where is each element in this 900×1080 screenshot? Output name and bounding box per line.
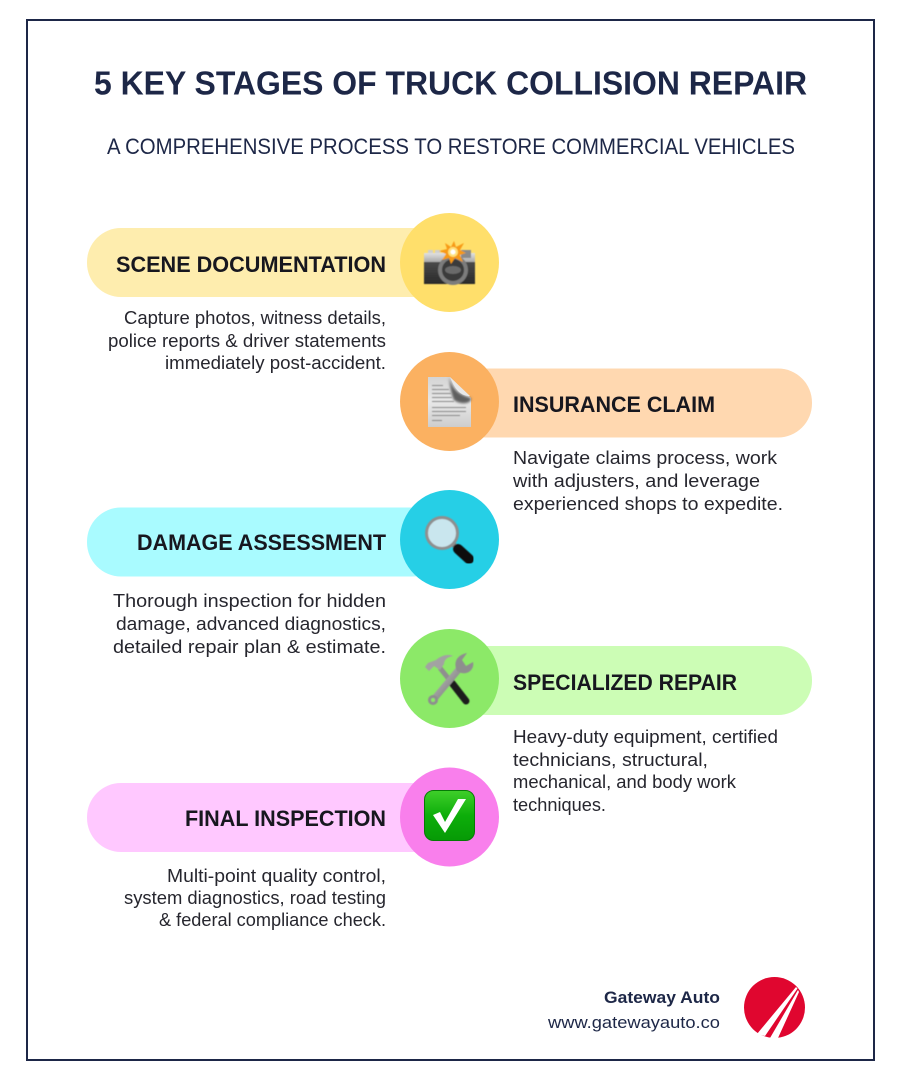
description: Navigate claims process, work <box>513 448 778 468</box>
description: system diagnostics, road testing <box>124 888 386 908</box>
description: police reports & driver statements <box>108 331 386 351</box>
heading: SPECIALIZED REPAIR <box>513 670 737 695</box>
heading: SCENE DOCUMENTATION <box>116 252 386 277</box>
circle <box>400 768 499 866</box>
description: Multi-point quality control, <box>167 866 386 886</box>
panel: insurance claim <box>400 352 812 514</box>
panel: damage assessment <box>87 490 499 657</box>
icon: hammer and wrench <box>425 653 473 705</box>
description <box>512 448 783 514</box>
description: technicians, structural, <box>513 750 708 770</box>
description: immediately post-accident. <box>165 353 386 373</box>
description <box>513 727 778 815</box>
circle <box>400 629 499 728</box>
description: experienced shops to expedite. <box>513 494 783 514</box>
description: mechanical, and body work <box>513 772 737 792</box>
pill <box>87 508 447 576</box>
heading: FINAL INSPECTION <box>185 806 386 831</box>
panel: specialized repair <box>400 629 812 815</box>
heading: INSURANCE CLAIM <box>513 392 715 417</box>
description: techniques. <box>513 795 606 815</box>
description: damage, advanced diagnostics, <box>116 614 386 634</box>
panel: final inspection <box>87 768 499 930</box>
icon: check mark <box>424 790 474 840</box>
title: 5 KEY STAGES OF TRUCK COLLISION REPAIR <box>94 64 807 102</box>
icon: camera with flash <box>424 241 475 285</box>
pill <box>452 368 812 438</box>
description: Heavy-duty equipment, certified <box>513 727 778 747</box>
circle <box>400 490 499 589</box>
pill <box>452 646 812 715</box>
panel: scene documentation <box>87 213 499 373</box>
description <box>124 866 386 930</box>
subtitle: A COMPREHENSIVE PROCESS TO RESTORE COMMERCIAL VEHICLES <box>107 134 795 159</box>
footer: brand name: Gateway Auto <box>604 989 720 1007</box>
footer: website: www.gatewayauto.co <box>547 1014 720 1032</box>
circle <box>400 213 499 312</box>
description: with adjusters, and leverage <box>512 471 760 491</box>
description <box>108 308 386 373</box>
description <box>113 591 386 657</box>
icon: magnifying glass <box>426 518 469 559</box>
heading: DAMAGE ASSESSMENT <box>137 530 387 555</box>
description: Thorough inspection for hidden <box>113 591 386 611</box>
description: Capture photos, witness details, <box>124 308 386 328</box>
pill <box>87 228 447 297</box>
icon: document page <box>428 377 471 427</box>
circle <box>400 352 499 451</box>
description: & federal compliance check. <box>159 910 386 930</box>
pill <box>87 783 447 852</box>
description: detailed repair plan & estimate. <box>113 637 386 657</box>
logo <box>744 977 805 1038</box>
